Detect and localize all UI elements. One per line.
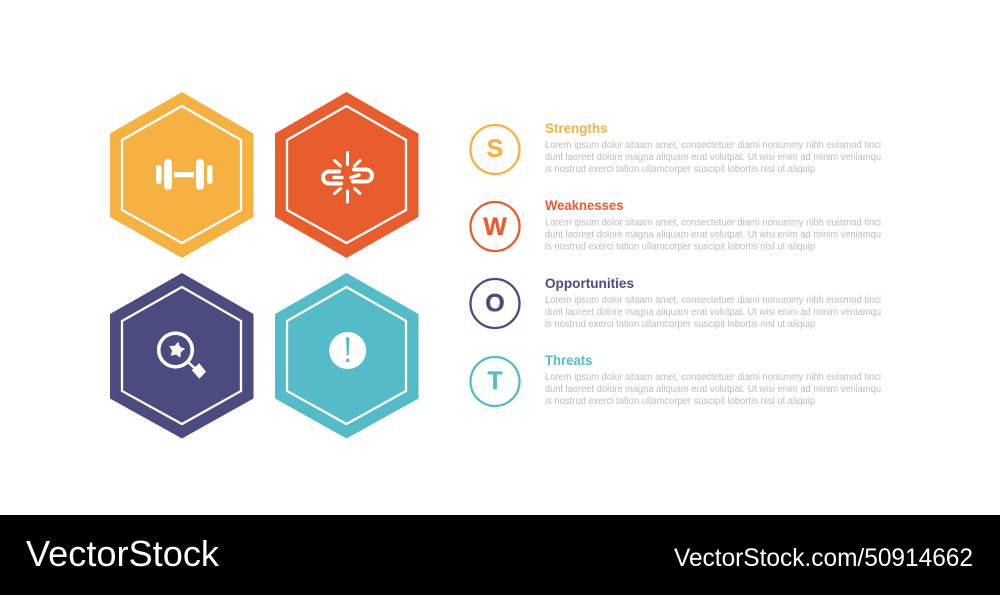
- body text: Lorem ipsum dolor sitaam amet, consectetuer diami nonummy nibh euismod tinci: [545, 218, 881, 228]
- heading: threats: Threats: [545, 353, 592, 368]
- row: strengths: [470, 121, 881, 175]
- badge W: W: [483, 213, 507, 241]
- footer logo: VectorStock: [26, 533, 220, 574]
- heading: opportunities: Opportunities: [545, 276, 634, 291]
- body text: is nostrud exerci tation ullamcorper suscipit lobortis nisl ut aliquip: [545, 319, 815, 330]
- body text: dunt laoreet dolore magna aliquam erat volutpat. Ut wisi enim ad minim veniamqu: [545, 152, 881, 163]
- body text: dunt laoreet dolore magna aliquam erat volutpat. Ut wisi enim ad minim veniamqu: [545, 384, 881, 395]
- hexagon: weaknesses: [275, 92, 418, 258]
- heading: weaknesses: Weaknesses: [545, 198, 624, 213]
- row: opportunities: [470, 276, 881, 330]
- badge O: [470, 279, 520, 328]
- heading: strengths: Strengths: [545, 121, 608, 136]
- body text: dunt laoreet dolore magna aliquam erat volutpat. Ut wisi enim ad minim veniamqu: [545, 230, 881, 240]
- icon: magnifier with star: [159, 333, 206, 379]
- row: threats: [470, 353, 881, 407]
- body text: is nostrud exerci tation ullamcorper suscipit lobortis nisl ut aliquip: [545, 242, 815, 252]
- footer id: VectorStock.com/50914662: [674, 544, 973, 572]
- body text: is nostrud exerci tation ullamcorper suscipit lobortis nisl ut aliquip: [545, 396, 815, 407]
- hexagon: opportunities: [110, 273, 254, 438]
- icon: exclamation circle: [329, 332, 366, 369]
- body text: [545, 140, 881, 175]
- body text: [545, 218, 881, 252]
- hexagon: strengths: [110, 92, 254, 258]
- badge W: [470, 202, 520, 251]
- badge T: [470, 357, 520, 406]
- row: weaknesses: [470, 198, 881, 252]
- icon: broken chain link: [323, 152, 372, 202]
- body text: Lorem ipsum dolor sitaam amet, consectetuer diami nonummy nibh euismod tinci: [545, 372, 881, 383]
- body text: is nostrud exerci tation ullamcorper suscipit lobortis nisl ut aliquip: [545, 164, 815, 175]
- badge S: S: [487, 135, 503, 163]
- body text: dunt laoreet dolore magna aliquam erat volutpat. Ut wisi enim ad minim veniamqu: [545, 307, 881, 318]
- badge T: T: [487, 367, 503, 395]
- hexagon: threats: [275, 273, 418, 438]
- badge O: O: [485, 290, 505, 318]
- body text: Lorem ipsum dolor sitaam amet, consectetuer diami nonummy nibh euismod tinci: [545, 140, 881, 151]
- body text: [545, 372, 881, 407]
- icon: dumbbell: [156, 159, 212, 190]
- footer band: [0, 515, 1000, 595]
- body text: [545, 295, 881, 330]
- body text: Lorem ipsum dolor sitaam amet, consectetuer diami nonummy nibh euismod tinci: [545, 295, 881, 306]
- badge S: [470, 125, 520, 174]
